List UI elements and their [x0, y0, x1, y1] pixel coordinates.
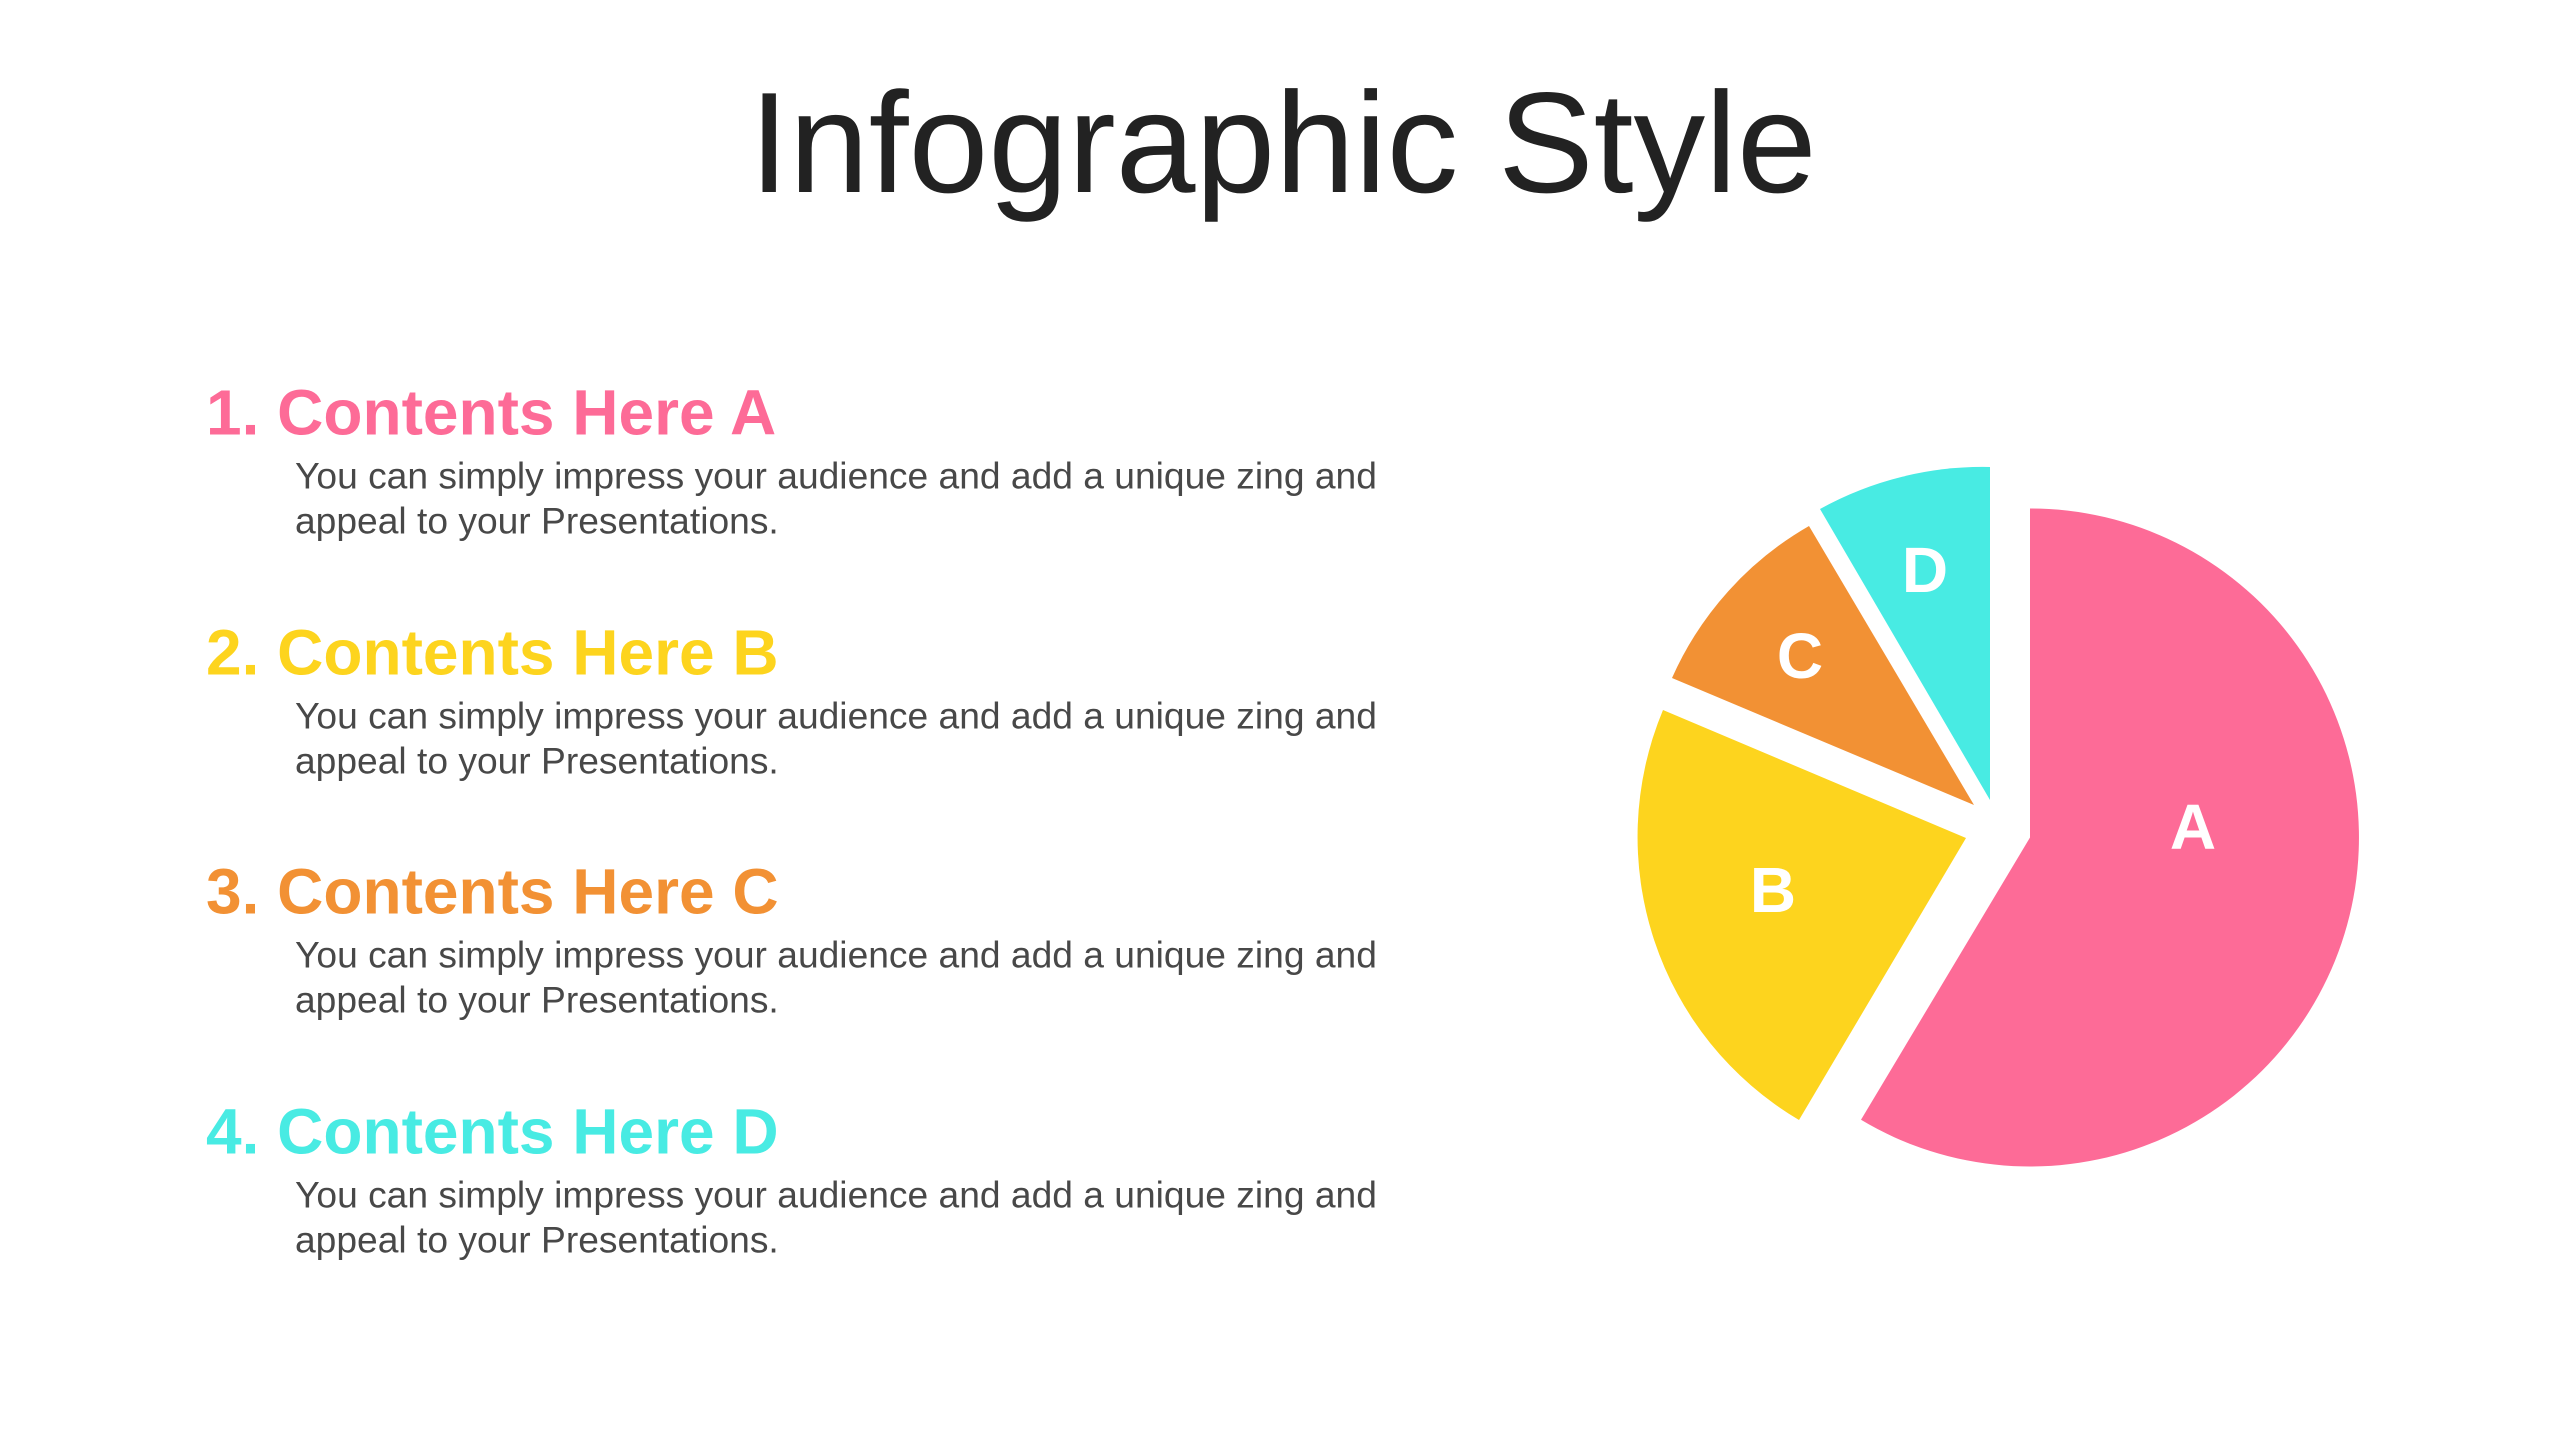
- item D: [206, 1096, 1377, 1260]
- body text A: You can simply impress your audience and add a unique zing and: [295, 454, 1377, 496]
- heading B: 2. Contents Here B: [206, 616, 779, 688]
- slice C: [1672, 526, 1974, 805]
- body text D: You can simply impress your audience and add a unique zing and: [295, 1174, 1377, 1216]
- slice C: C: [1777, 620, 1823, 692]
- body text C: You can simply impress your audience and add a unique zing and: [295, 934, 1377, 976]
- pie chart: [1638, 467, 2359, 1166]
- body text D: appeal to your Presentations.: [295, 1218, 779, 1260]
- body text A: appeal to your Presentations.: [295, 500, 779, 542]
- title: Infographic Style: [749, 63, 1817, 223]
- heading A: 1. Contents Here A: [206, 376, 776, 448]
- slice A: A: [2170, 791, 2216, 863]
- heading D: 4. Contents Here D: [206, 1096, 779, 1168]
- item A: [206, 376, 1377, 542]
- slice B: [1638, 710, 1966, 1120]
- slice B: B: [1750, 854, 1796, 926]
- item C: [206, 856, 1377, 1020]
- body text B: appeal to your Presentations.: [295, 740, 779, 782]
- body text B: You can simply impress your audience and add a unique zing and: [295, 694, 1377, 736]
- heading C: 3. Contents Here C: [206, 856, 779, 928]
- panel: item list: [206, 376, 1377, 1260]
- slice A: [1861, 508, 2359, 1166]
- body text C: appeal to your Presentations.: [295, 978, 779, 1020]
- slice D: [1820, 467, 1990, 800]
- slice D: D: [1902, 534, 1948, 606]
- item B: [206, 616, 1377, 782]
